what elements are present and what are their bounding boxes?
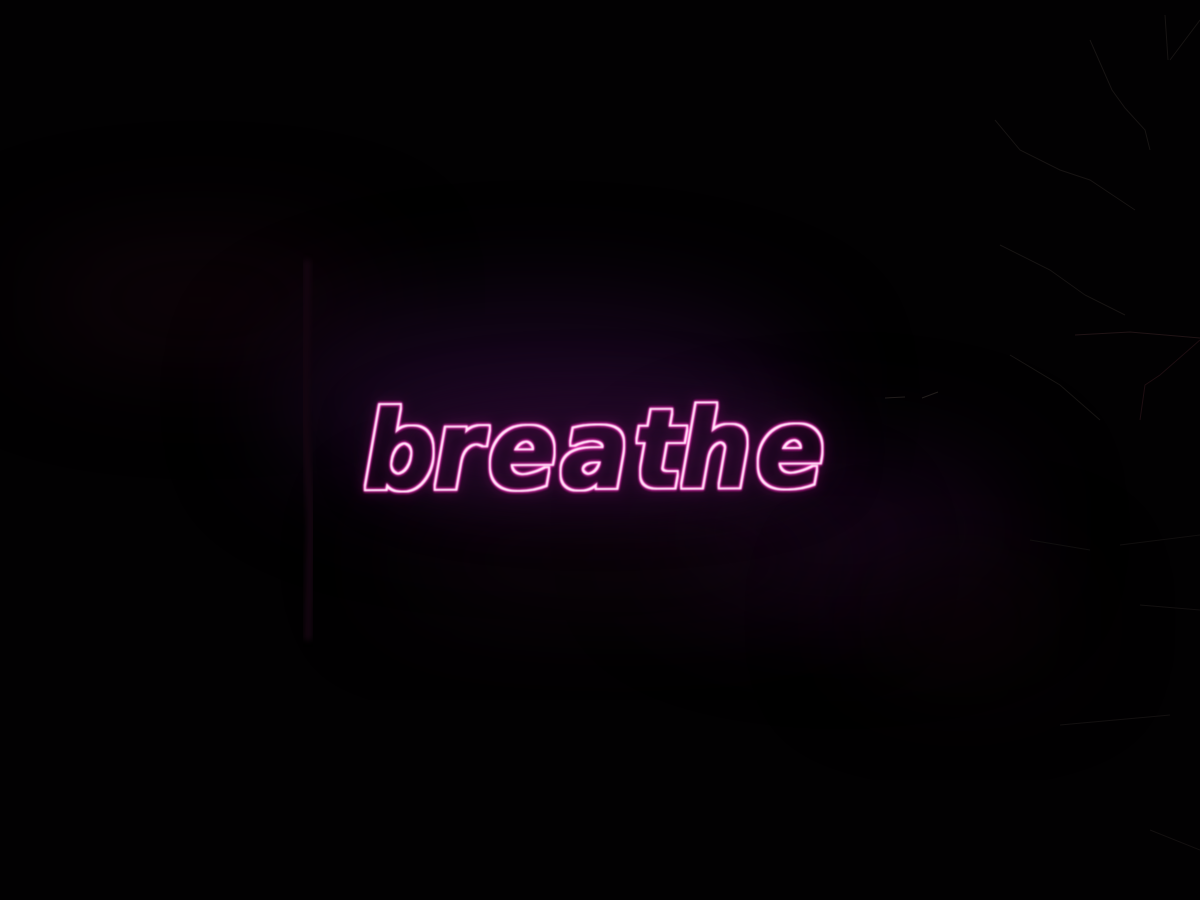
purple haze glow [30, 250, 1060, 660]
tree branches right [885, 15, 1200, 850]
tree trunk left [305, 260, 311, 640]
neon word: breathe: breathe [363, 385, 825, 514]
